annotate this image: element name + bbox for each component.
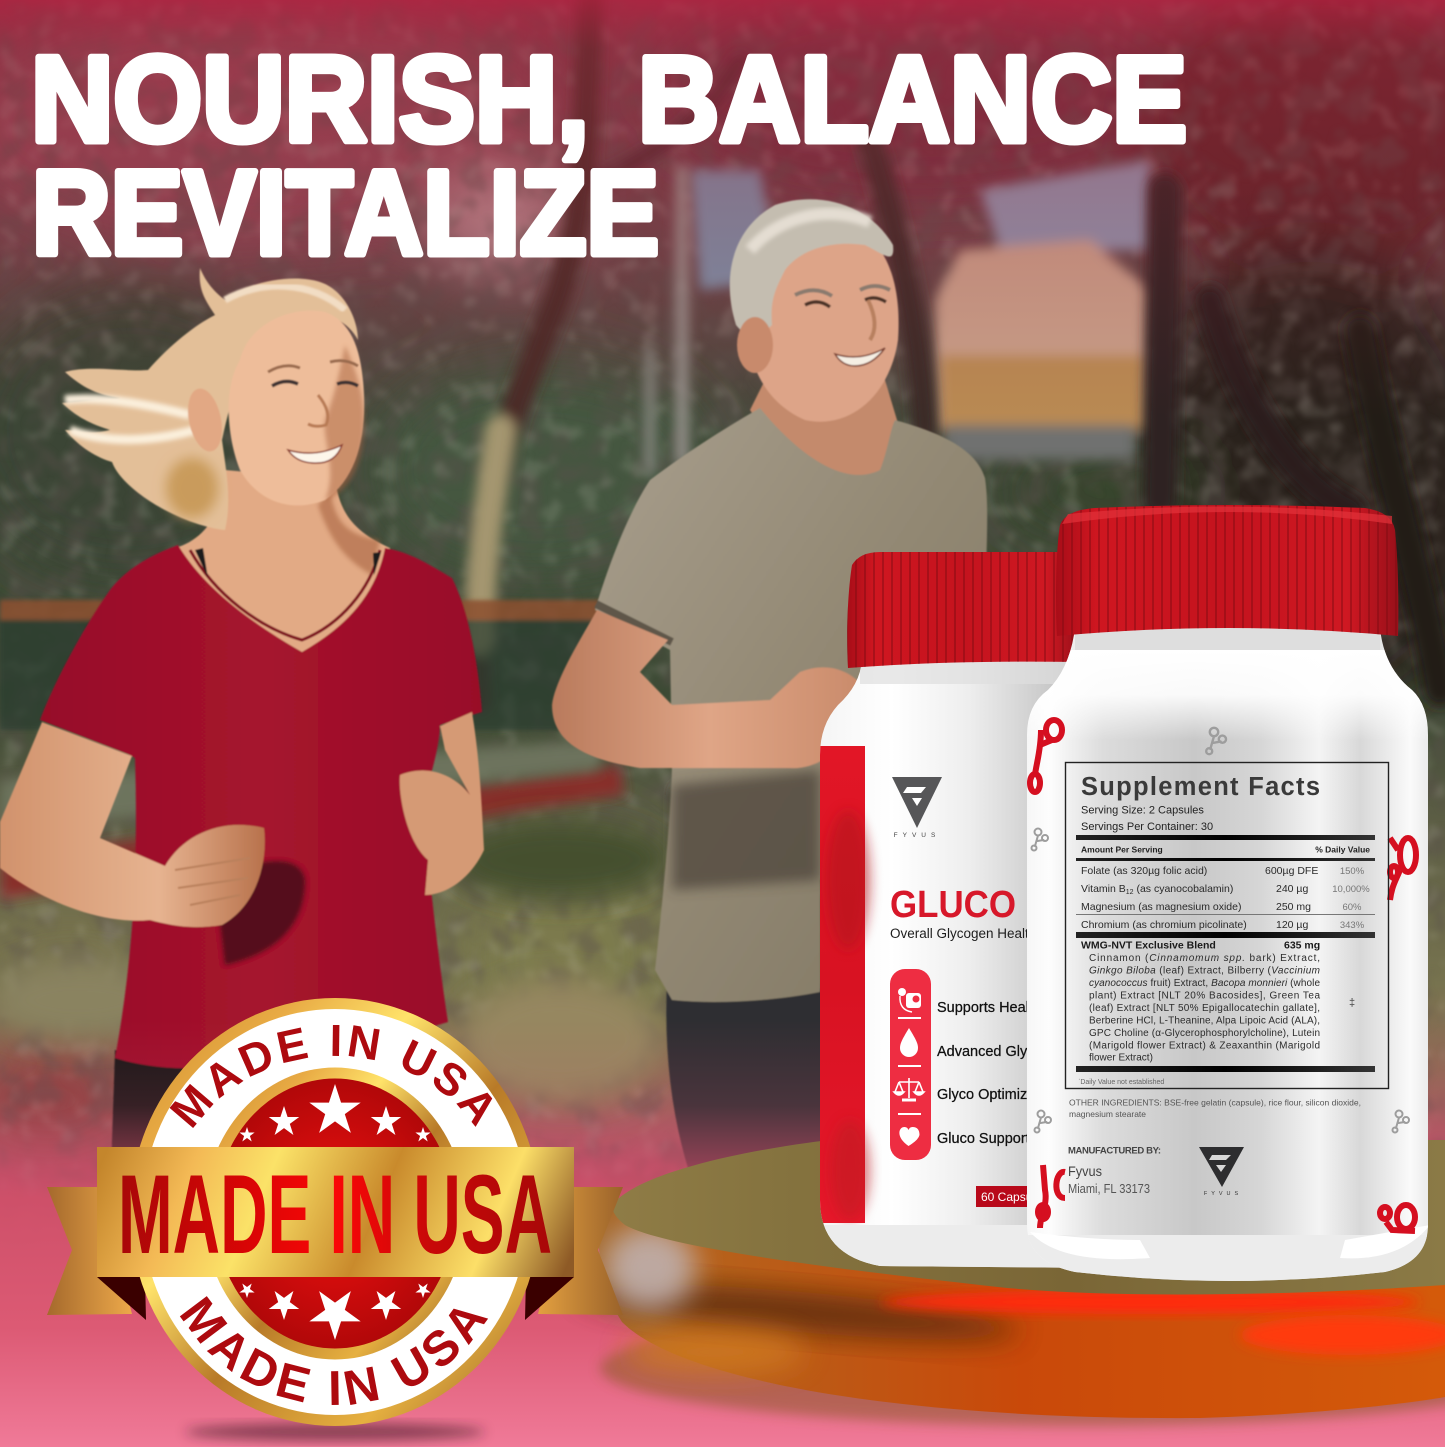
supplement facts panel: 150% [1340, 866, 1365, 877]
woman neck and chest [175, 470, 390, 662]
title: REVITALIZE [32, 146, 659, 280]
man neck [750, 380, 900, 485]
benefit list [936, 1000, 1027, 1146]
Fyvus logo: FYVUS [894, 832, 940, 839]
blend ingredient list: flower Extract) [1089, 1052, 1153, 1064]
nutrient rows [1081, 865, 1318, 931]
product tagline: Overall Glycogen Health [890, 926, 1036, 941]
blend ingredient list: Ginkgo Biloba (leaf) Extract, Bilberry (Vaccinium [1089, 966, 1320, 976]
supplement facts panel: WMG-NVT Exclusive Blend [1081, 940, 1216, 952]
tree trunks [475, 0, 1440, 700]
supplement facts panel: Amount Per Serving [1081, 844, 1163, 854]
manufacturer block: Fyvus [1068, 1163, 1102, 1179]
back bottle cap [847, 552, 1080, 668]
Fyvus logo [892, 777, 942, 839]
made in USA badge [47, 998, 623, 1446]
other ingredients: OTHER INGREDIENTS: BSE-free gelatin (capsule), rice flour, silicon dioxide, [1069, 1098, 1361, 1108]
curved text top: MADE IN USA [170, 1025, 492, 1128]
back product bottle [820, 552, 1074, 1268]
gold banner [97, 1147, 574, 1277]
blend ingredient list: plant) Extract [NLT 20% Bacosides], Green Tea [1089, 990, 1320, 1002]
man left arm and hand [552, 610, 866, 768]
blend ingredient list: (leaf) Extract [NLT 50% Epigallocatechin gallate], [1089, 1003, 1320, 1014]
blend ingredient list [1089, 953, 1320, 1064]
man t-shirt [595, 408, 987, 1002]
person: woman jogging [0, 268, 484, 1200]
capsule count tag [976, 1186, 1027, 1207]
manufacturer block [1068, 1146, 1161, 1196]
nutrient rows: Vitamin B [1081, 883, 1126, 895]
other ingredients [1069, 1098, 1361, 1119]
blend ingredient list: Cinnamon (Cinnamomum spp. bark) Extract, [1089, 953, 1320, 964]
pedestal [579, 1140, 1445, 1426]
supplement facts panel: % Daily Value [1315, 844, 1370, 854]
product name: GLUCO [890, 884, 1016, 926]
blend ingredient list: (Marigold flower Extract) & Zeaxanthin (Marigold [1089, 1040, 1320, 1052]
lower disc reflection [600, 1310, 1445, 1426]
icon: balance scale [894, 1078, 924, 1100]
woman facial features [268, 361, 358, 372]
pedestal side [598, 1200, 1445, 1418]
red label strip [815, 746, 865, 1223]
front bottle body [1020, 625, 1435, 1285]
Fyvus logo small [1199, 1147, 1244, 1197]
supplement facts panel: Servings Per Container: 30 [1081, 821, 1213, 833]
nutrient rows: 240 µg [1276, 883, 1308, 895]
sky and building [690, 160, 1150, 460]
nutrient rows: Chromium (as chromium picolinate) [1081, 919, 1247, 931]
benefit list: Advanced Glycogen [937, 1044, 1067, 1060]
back bottle body [820, 662, 1066, 1268]
curved text bottom: MADE IN USA [180, 1296, 488, 1405]
title: NOURISH, [31, 31, 589, 167]
front product bottle [1020, 505, 1435, 1285]
blend ingredient list: cyanococcus fruit) Extract, Bacopa monnieri (whole [1089, 978, 1320, 989]
supplement facts panel: 60% [1342, 902, 1362, 913]
manufacturer block: Miami, FL 33173 [1068, 1182, 1150, 1196]
man trousers [666, 965, 830, 1175]
blend ingredient list: Berberine HCl, L-Theanine, Alpa Lipoic Acid (ALA), [1089, 1016, 1320, 1026]
supplement facts panel: ˈDaily Value not established [1078, 1078, 1164, 1086]
nutrient rows: 600µg DFE [1265, 865, 1318, 877]
woman face [183, 311, 364, 505]
nutrient rows: Folate (as 320µg folic acid) [1081, 865, 1207, 877]
decorative grey molecules [1032, 728, 1409, 1132]
woman right arm and fist [400, 712, 484, 895]
nutrient rows: 250 mg [1276, 901, 1311, 913]
woman black leggings [110, 1050, 240, 1200]
panel heading: Supplement Facts [1081, 773, 1320, 801]
manufacturer block: MANUFACTURED BY: [1068, 1146, 1161, 1156]
person: man jogging [552, 199, 987, 1175]
icon: heart with pulse [899, 1127, 920, 1146]
title: BALANCE [638, 31, 1187, 167]
nutrient rows: 12 [1126, 889, 1134, 896]
woman hair [62, 268, 358, 530]
fence and running track [0, 600, 625, 900]
front bottle cap [1056, 505, 1398, 636]
woman left arm and fist [0, 722, 265, 927]
ribbon tails [47, 1187, 623, 1320]
supplement facts panel: 10,000% [1332, 884, 1370, 895]
blend ingredient list: GPC Choline (α-Glycerophosphorylcholine), Lutein [1089, 1028, 1320, 1039]
benefit icons pill [890, 969, 931, 1160]
supplement facts panel: 635 mg [1284, 940, 1320, 952]
stars [239, 1084, 431, 1340]
benefit list: Supports Healthy [937, 1000, 1049, 1016]
supplement facts panel: 343% [1340, 920, 1365, 931]
woman red t-shirt [40, 545, 482, 1068]
banner text: MADE IN USA [118, 1152, 552, 1277]
pink fade over lower scene [0, 1020, 1445, 1447]
nutrient rows: Magnesium (as magnesium oxide) [1081, 901, 1241, 913]
gold ring [130, 998, 540, 1426]
pedestal top surface [612, 1140, 1445, 1294]
supplement facts panel: ‡ [1349, 997, 1355, 1009]
other ingredients: magnesium stearate [1069, 1109, 1146, 1119]
capsule count tag: 60 Capsules [981, 1190, 1048, 1204]
man facial features [795, 286, 890, 296]
supplement facts panel: Serving Size: 2 Capsules [1081, 804, 1204, 816]
icon: water drop [900, 1028, 918, 1057]
inner gold ring and red disc [204, 1068, 466, 1360]
title [31, 31, 1187, 280]
icon: blood pressure cuff [898, 988, 921, 1012]
decorative red molecules wrapping around the bottle edges [1030, 720, 1416, 1231]
benefit list: Gluco Support [937, 1131, 1030, 1147]
benefit list: Glyco Optimization [937, 1087, 1059, 1103]
man head and hair [730, 199, 899, 422]
supplement facts panel [1066, 762, 1388, 1088]
nutrient rows: (as cyanocobalamin) [1134, 883, 1233, 895]
nutrient rows: 120 µg [1276, 919, 1308, 931]
Fyvus logo small: FYVUS [1204, 1191, 1242, 1197]
